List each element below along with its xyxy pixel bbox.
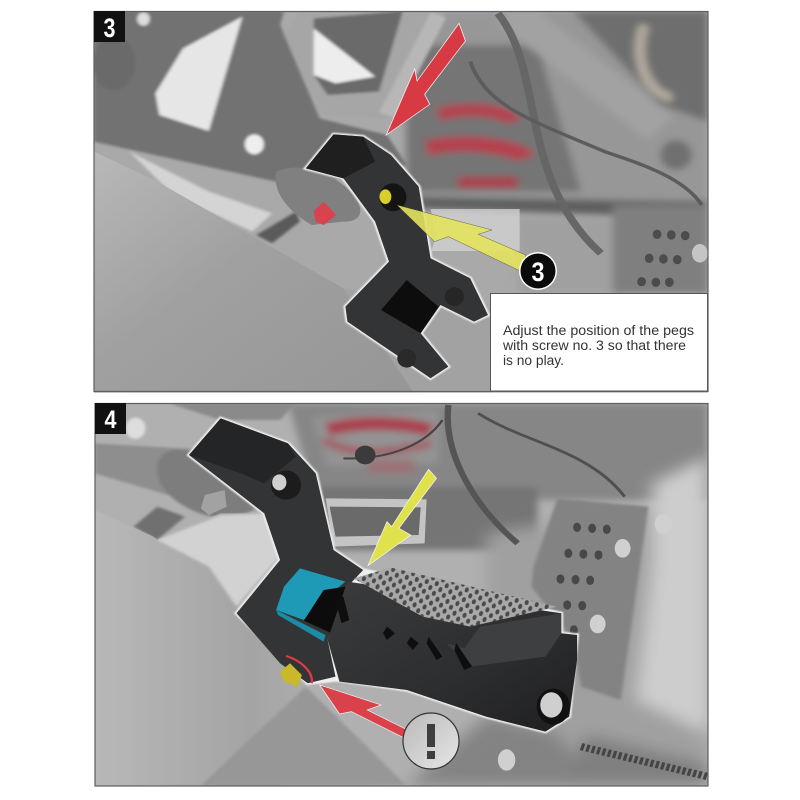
red screw tip xyxy=(314,202,336,225)
left frame and fairing xyxy=(95,403,296,540)
yellow arrow xyxy=(368,469,437,566)
panel: step 3 xyxy=(92,11,708,393)
bracket xyxy=(306,134,488,378)
peg end screw xyxy=(537,689,570,725)
panel: step 4 xyxy=(95,403,708,786)
top screw xyxy=(271,470,301,500)
peg tread xyxy=(353,568,557,627)
peg mount knob xyxy=(276,168,360,225)
warning icon: exclamation mark xyxy=(403,713,459,769)
text box: instruction: is no play. xyxy=(503,353,564,368)
label plate xyxy=(431,209,520,251)
step badge 3 xyxy=(94,11,125,43)
screw hole and yellow screw xyxy=(379,183,406,211)
frame arm with windows xyxy=(92,11,446,243)
text box: instruction: with screw no. 3 so that there xyxy=(502,338,686,353)
photo: step 3 bracket mounted on the frame xyxy=(92,11,708,393)
label plate xyxy=(326,498,427,547)
step badge 4 xyxy=(95,403,126,434)
belt xyxy=(581,747,708,777)
glow around parts xyxy=(189,418,577,732)
text box: instruction xyxy=(490,294,708,391)
panel border xyxy=(94,12,708,392)
cables xyxy=(448,405,518,543)
step badge 4: 4 xyxy=(104,406,117,434)
red arrow xyxy=(320,685,411,738)
step badge 3: 3 xyxy=(104,13,116,43)
number callout 3 xyxy=(519,252,557,290)
yellow screw with red ring xyxy=(280,656,312,687)
yellow arrow xyxy=(397,205,526,272)
peg body xyxy=(328,582,577,732)
number callout 3: 3 xyxy=(532,257,544,287)
plate dots xyxy=(637,230,708,287)
glow around bracket xyxy=(306,134,488,378)
blue spacer xyxy=(276,568,345,620)
infographic: footpeg installation steps xyxy=(93,10,709,787)
lower fairing xyxy=(94,152,415,393)
panel border xyxy=(95,404,708,786)
plate dots xyxy=(556,523,611,635)
photo: step 4 footpeg fitted xyxy=(95,403,708,786)
cable xyxy=(470,13,702,253)
red arrow xyxy=(386,23,465,135)
bracket xyxy=(189,418,363,683)
text box: instruction: Adjust the position of the pegs xyxy=(503,323,694,338)
